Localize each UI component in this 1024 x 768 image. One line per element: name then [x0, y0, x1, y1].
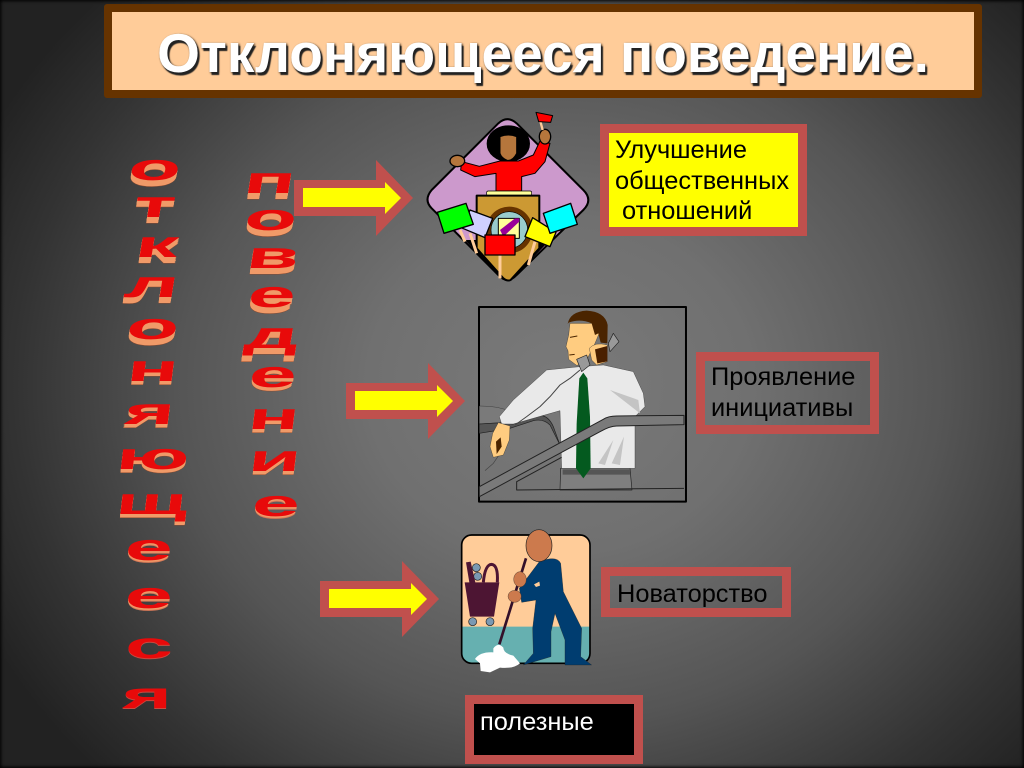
arrow 1	[294, 160, 413, 236]
icon: speaker at podium with signs	[427, 112, 588, 281]
vertical word: поведение: д	[241, 315, 303, 356]
box: showing initiative	[696, 352, 879, 434]
vertical word: поведение: н	[246, 396, 302, 437]
icon: cleaner with mop	[462, 530, 592, 672]
arrow 3	[320, 561, 439, 637]
vertical word: отклоняющееся: с	[125, 625, 173, 666]
vertical word: поведение: о	[241, 197, 301, 238]
box: innovation	[601, 567, 791, 617]
vertical word: отклоняющееся: о	[123, 306, 183, 347]
arrow 2	[346, 363, 465, 439]
icon: man on telephone	[479, 307, 686, 502]
vertical word: отклоняющееся: я	[122, 675, 172, 716]
vertical word: поведение: и	[246, 438, 304, 479]
box: useful	[465, 695, 643, 764]
box: showing initiative: Проявление инициативы	[711, 363, 855, 422]
vertical word: отклоняющееся: н	[125, 348, 181, 389]
vertical word: отклоняющееся: е	[123, 527, 175, 568]
vertical word: поведение: е	[245, 274, 299, 315]
box: useful: полезные	[480, 708, 594, 736]
vertical word: отклоняющееся: я	[123, 391, 178, 432]
vertical word: отклоняющееся: к	[132, 224, 182, 265]
vertical word: поведение: е	[250, 483, 302, 524]
vertical word: отклоняющееся: е	[123, 575, 175, 616]
vertical word: отклоняющееся: т	[131, 184, 179, 225]
vertical word: отклоняющееся: щ	[113, 481, 191, 522]
vertical word: отклоняющееся: л	[121, 264, 183, 305]
vertical word: отклоняющееся: ю	[114, 436, 192, 477]
box: innovation: Новаторство	[617, 580, 767, 608]
vertical word: поведение: п	[241, 160, 299, 201]
title banner	[104, 4, 982, 98]
vertical word: отклоняющееся: о	[125, 147, 185, 188]
vertical word: поведение: в	[243, 235, 303, 276]
vertical word: поведение: е	[247, 354, 299, 395]
title banner: Отклоняющееся поведение.	[157, 22, 929, 84]
box: improving public relations: Улучшение общественных отношений	[615, 136, 789, 225]
box: improving public relations	[600, 124, 807, 236]
